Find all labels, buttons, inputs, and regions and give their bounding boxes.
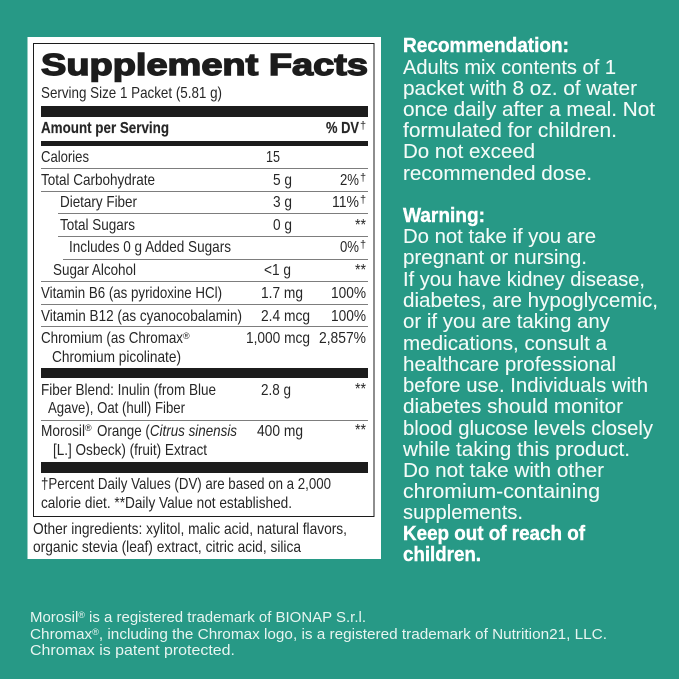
row: total carbohydrate: 5 g <box>273 172 292 189</box>
row: calories: Calories <box>41 149 89 166</box>
footnote: calorie diet. **Daily Value not established. <box>41 495 292 512</box>
warning text: Do not take if you are <box>403 226 596 248</box>
row: dietary fiber: Dietary Fiber <box>60 194 138 211</box>
row: total sugars: 0 g <box>273 217 292 234</box>
recommendation text: Adults mix contents of 1 <box>403 57 616 79</box>
row: fiber blend: Agave), Oat (hull) Fiber <box>48 400 186 417</box>
row: morosil orange: [L.] Osbeck) (fruit) Extract <box>53 442 207 459</box>
warning text: diabetes, are hypoglycemic, <box>403 290 658 312</box>
row: sugar alcohol <box>53 262 366 279</box>
row: calories <box>41 149 280 166</box>
warning text: medications, consult a <box>403 333 608 355</box>
other ingredients <box>33 521 347 556</box>
row: dietary fiber: † <box>360 194 366 206</box>
row: morosil orange <box>41 422 366 459</box>
trademark notes: ® <box>78 610 85 620</box>
warning text: healthcare professional <box>403 354 616 376</box>
table header: % DV <box>326 120 359 137</box>
other ingredients: Other ingredients: xylitol, malic acid, natural flavors, <box>33 521 347 538</box>
row: sugar alcohol: <1 g <box>264 262 291 279</box>
row: vitamin B6: Vitamin B6 (as pyridoxine HCl) <box>41 285 222 302</box>
row: vitamin B6: 100% <box>331 285 366 302</box>
table header: Amount per Serving <box>41 120 169 137</box>
row: chromium: ® <box>183 331 190 341</box>
row: added sugars: 0% <box>340 239 359 256</box>
trademark notes: Morosil <box>30 609 78 626</box>
warning text: chromium-containing <box>403 481 600 503</box>
row: chromium: 1,000 mcg <box>246 330 310 347</box>
warning text: before use. Individuals with <box>403 375 648 397</box>
row: sugar alcohol: ** <box>355 262 366 279</box>
recommendation text: Do not exceed <box>403 141 535 163</box>
row: vitamin B6 <box>41 285 366 302</box>
warning text: pregnant or nursing. <box>403 247 587 269</box>
row: sugar alcohol: Sugar Alcohol <box>53 262 136 279</box>
row: total sugars <box>60 217 366 234</box>
row: total sugars: Total Sugars <box>60 217 135 234</box>
row: total carbohydrate <box>41 172 366 189</box>
row: chromium: Chromium (as Chromax <box>41 330 183 347</box>
row: morosil orange: 400 mg <box>257 423 303 440</box>
row: dietary fiber: 3 g <box>273 194 292 211</box>
row: fiber blend: ** <box>355 381 366 398</box>
recommendation text: packet with 8 oz. of water <box>403 78 637 100</box>
row: dietary fiber <box>60 194 366 211</box>
row: dietary fiber: 11% <box>332 194 359 211</box>
panel: supplement facts card <box>28 37 381 559</box>
trademark notes <box>30 609 607 659</box>
row: morosil orange: Orange (Citrus sinensis <box>97 423 237 440</box>
row: morosil orange: ** <box>355 422 366 439</box>
row: morosil orange: Morosil <box>41 423 85 440</box>
keep out of reach warning <box>403 523 585 566</box>
trademark notes: , including the Chromax logo, is a registered trademark of Nutrition21, LLC. <box>99 626 607 643</box>
warning text <box>402 226 658 524</box>
trademark notes: Chromax <box>30 626 91 643</box>
trademark notes: Chromax is patent protected. <box>30 642 235 659</box>
keep out of reach warning: children. <box>403 544 481 566</box>
row: added sugars: † <box>360 239 366 251</box>
warning text: while taking this product. <box>402 439 630 461</box>
warning heading: Warning: <box>403 205 485 227</box>
row: calories: 15 <box>266 149 280 166</box>
trademark notes: is a registered trademark of BIONAP S.r.l. <box>85 609 366 626</box>
warning text: diabetes should monitor <box>403 396 623 418</box>
row: chromium: Chromium picolinate) <box>52 349 181 366</box>
table header <box>41 120 366 137</box>
row: total sugars: ** <box>355 217 366 234</box>
row: vitamin B12: 2.4 mcg <box>261 308 310 325</box>
recommendation text: formulated for children. <box>403 120 617 142</box>
row: vitamin B6: 1.7 mg <box>261 285 303 302</box>
row: chromium: 2,857% <box>319 330 366 347</box>
row: chromium <box>41 330 366 366</box>
other ingredients: organic stevia (leaf) extract, citric acid, silica <box>33 539 301 556</box>
warning text: supplements. <box>403 502 523 524</box>
recommendation text: recommended dose. <box>403 163 592 185</box>
trademark notes: ® <box>92 627 99 637</box>
warning text: or if you are taking any <box>403 311 610 333</box>
recommendation text <box>403 57 655 185</box>
row: fiber blend <box>41 381 366 417</box>
row: added sugars: Includes 0 g Added Sugars <box>69 239 231 256</box>
footnote: †Percent Daily Values (DV) are based on a 2,000 <box>41 476 331 493</box>
serving size: Serving Size 1 Packet (5.81 g) <box>41 85 222 102</box>
row: morosil orange: ® <box>85 423 92 433</box>
warning text: blood glucose levels closely <box>403 418 653 440</box>
footnote <box>41 476 331 512</box>
keep out of reach warning: Keep out of reach of <box>403 523 585 545</box>
warning text: Do not take with other <box>403 460 604 482</box>
title: Supplement Facts <box>41 47 368 82</box>
row: total carbohydrate: † <box>360 172 366 184</box>
row: vitamin B12: 100% <box>331 308 366 325</box>
row: fiber blend: 2.8 g <box>261 382 291 399</box>
row: fiber blend: Fiber Blend: Inulin (from Blue <box>41 382 216 399</box>
row: vitamin B12: Vitamin B12 (as cyanocobalamin) <box>41 308 242 325</box>
recommendation heading: Recommendation: <box>403 35 569 57</box>
recommendation text: once daily after a meal. Not <box>403 99 655 121</box>
table header: † <box>360 120 366 132</box>
row: total carbohydrate: 2% <box>340 172 359 189</box>
warning text: If you have kidney disease, <box>403 269 645 291</box>
row: added sugars <box>69 239 366 256</box>
row: total carbohydrate: Total Carbohydrate <box>41 172 155 189</box>
